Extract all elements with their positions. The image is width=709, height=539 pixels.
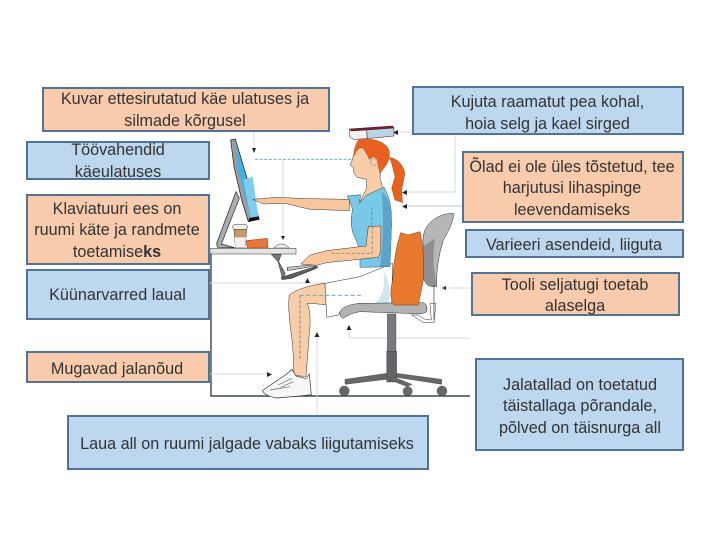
book on head <box>349 126 394 139</box>
person: torso <box>347 187 392 267</box>
callout: tools <box>27 141 209 181</box>
callout: book: hoia selg ja kael sirged <box>465 115 630 133</box>
callout: shoulders: Õlad ei ole üles tõstetud, tee <box>469 156 675 176</box>
callout: book: Kujuta raamatut pea kohal, <box>451 93 644 111</box>
person: arms <box>253 197 381 265</box>
callout: keyboard <box>27 195 209 264</box>
shoe <box>262 369 311 398</box>
callout: monitor <box>43 88 329 131</box>
callout: chair back: alaselga <box>545 297 605 315</box>
callout: tools: Töövahendid <box>71 141 165 159</box>
callout: forearms: Küünarvarred laual <box>49 286 186 304</box>
callout: shoulders <box>463 152 683 222</box>
callout: leg room: Laua all on ruumi jalgade vabaks liigutamiseks <box>80 435 414 453</box>
callout: monitor: silmade kõrgusel <box>124 112 246 130</box>
person: legs and skirt <box>289 263 393 377</box>
illustration: ergonomic workstation <box>210 126 471 416</box>
callout: keyboard: ruumi käte ja randmete <box>34 221 200 239</box>
callout: monitor: Kuvar ettesirutatud käe ulatuses ja <box>61 90 309 108</box>
callout: shoes <box>27 352 209 382</box>
callout: shoes: Mugavad jalanõud <box>51 360 183 378</box>
chair backrest <box>423 213 454 320</box>
callout: chair back <box>472 273 679 315</box>
callout: keyboard: Klaviatuuri ees on <box>53 200 181 218</box>
coffee cup and desk items <box>233 225 289 248</box>
monitor <box>217 139 259 248</box>
person: head and neck <box>350 147 383 202</box>
callout: keyboard: toetamiseks <box>73 243 161 261</box>
callout: feet: põlved on täisnurga all <box>499 419 661 437</box>
callout: feet: Jalatallad on toetatud <box>503 376 657 394</box>
callout: tools: käeulatuses <box>75 163 161 181</box>
callout: shoulders: leevendamiseks <box>514 201 630 219</box>
arrowheads <box>252 130 446 377</box>
desk <box>210 248 317 280</box>
callout: vary positions: Varieeri asendeid, liiguta <box>486 236 662 254</box>
leader lines <box>210 131 471 416</box>
chair seat <box>340 303 427 318</box>
chair <box>339 303 447 396</box>
callout: leg room <box>68 416 428 469</box>
callout: feet: täistallaga põrandale, <box>503 397 657 415</box>
callout: shoulders: harjutusi lihaspinge <box>503 179 641 197</box>
lumbar cushion <box>391 232 424 305</box>
person: hair <box>255 139 405 203</box>
callout: chair back: Tooli seljatugi toetab <box>502 276 648 294</box>
callout: book <box>413 87 683 134</box>
callout: forearms <box>27 270 209 319</box>
floor and desk frame lines <box>211 253 470 396</box>
callout: feet <box>476 359 683 450</box>
callout: vary positions <box>466 230 683 257</box>
